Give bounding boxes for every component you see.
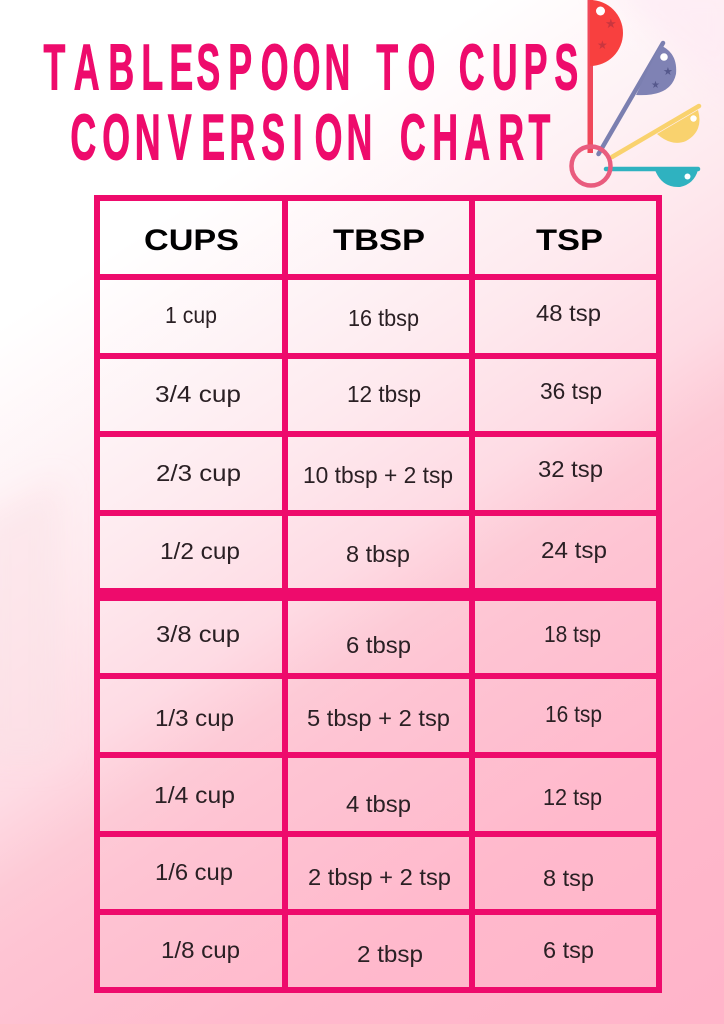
icon: teal spoon bbox=[606, 169, 698, 187]
row: 1 cup bbox=[165, 300, 601, 331]
header row: TBSP bbox=[333, 224, 425, 257]
row: 1/2 cup: 1/2 cup bbox=[160, 538, 240, 564]
header row: TSP bbox=[536, 224, 603, 257]
row: 1/4 cup: 4 tbsp bbox=[346, 791, 411, 817]
row: 1/6 cup: 1/6 cup bbox=[155, 859, 233, 885]
icon: red spoon: ★ bbox=[597, 38, 608, 52]
icon: purple spoon: ★ bbox=[663, 65, 673, 78]
row: 1/2 cup bbox=[160, 537, 607, 567]
icon: purple spoon bbox=[598, 43, 676, 154]
row: 1/6 cup: 2 tbsp + 2 tsp bbox=[308, 864, 451, 890]
row: 1/4 cup: 1/4 cup bbox=[154, 782, 235, 808]
title bbox=[43, 32, 578, 174]
row: 2/3 cup: 32 tsp bbox=[538, 456, 603, 482]
row: 1/8 cup: 2 tbsp bbox=[357, 941, 423, 967]
icon: yellow spoon bbox=[612, 106, 700, 157]
row: 1/8 cup: 1/8 cup bbox=[161, 937, 240, 963]
row: 1/4 cup: 12 tsp bbox=[543, 784, 602, 810]
icon: measuring spoons bbox=[572, 0, 700, 187]
row: 1/3 cup: 16 tsp bbox=[545, 701, 602, 727]
row: 3/4 cup bbox=[155, 378, 602, 407]
icon: ring bbox=[572, 146, 610, 186]
row: 1/2 cup: 24 tsp bbox=[541, 537, 607, 563]
row: 1/3 cup bbox=[155, 701, 602, 731]
row: 1/6 cup: 8 tsp bbox=[543, 865, 594, 891]
icon: red spoon bbox=[588, 0, 623, 153]
header row bbox=[144, 224, 603, 257]
row: 1/3 cup: 1/3 cup bbox=[155, 705, 234, 731]
row: 1 cup: 16 tbsp bbox=[348, 305, 419, 331]
row: 3/4 cup: 3/4 cup bbox=[155, 381, 241, 407]
row: 3/8 cup: 18 tsp bbox=[544, 621, 601, 647]
row: 2/3 cup: 2/3 cup bbox=[156, 460, 241, 486]
title: TABLESPOON TO CUPS bbox=[43, 32, 578, 104]
row: 3/8 cup: 6 tbsp bbox=[346, 632, 411, 658]
row: 1/2 cup: 8 tbsp bbox=[346, 541, 410, 567]
row: 1/8 cup: 6 tsp bbox=[543, 937, 594, 963]
row: 3/8 cup bbox=[156, 621, 601, 658]
conversion table bbox=[94, 195, 662, 993]
row: 1/8 cup bbox=[161, 937, 594, 967]
row: 3/4 cup: 36 tsp bbox=[540, 378, 602, 404]
table grid bbox=[94, 195, 662, 993]
header row: CUPS bbox=[144, 224, 239, 257]
row: 1 cup: 1 cup bbox=[165, 302, 217, 328]
row: 1/6 cup bbox=[155, 859, 594, 891]
row: 1/4 cup bbox=[154, 782, 602, 817]
title: CONVERSION CHART bbox=[70, 102, 550, 174]
row: 3/8 cup: 3/8 cup bbox=[156, 621, 240, 647]
row: 2/3 cup bbox=[156, 456, 603, 488]
icon: purple spoon: ★ bbox=[651, 80, 660, 91]
row: 1/3 cup: 5 tbsp + 2 tsp bbox=[307, 705, 450, 731]
row: 1 cup: 48 tsp bbox=[536, 300, 601, 326]
row: 3/4 cup: 12 tbsp bbox=[347, 381, 421, 407]
icon: red spoon: ★ bbox=[605, 17, 617, 32]
row: 2/3 cup: 10 tbsp + 2 tsp bbox=[303, 462, 453, 488]
